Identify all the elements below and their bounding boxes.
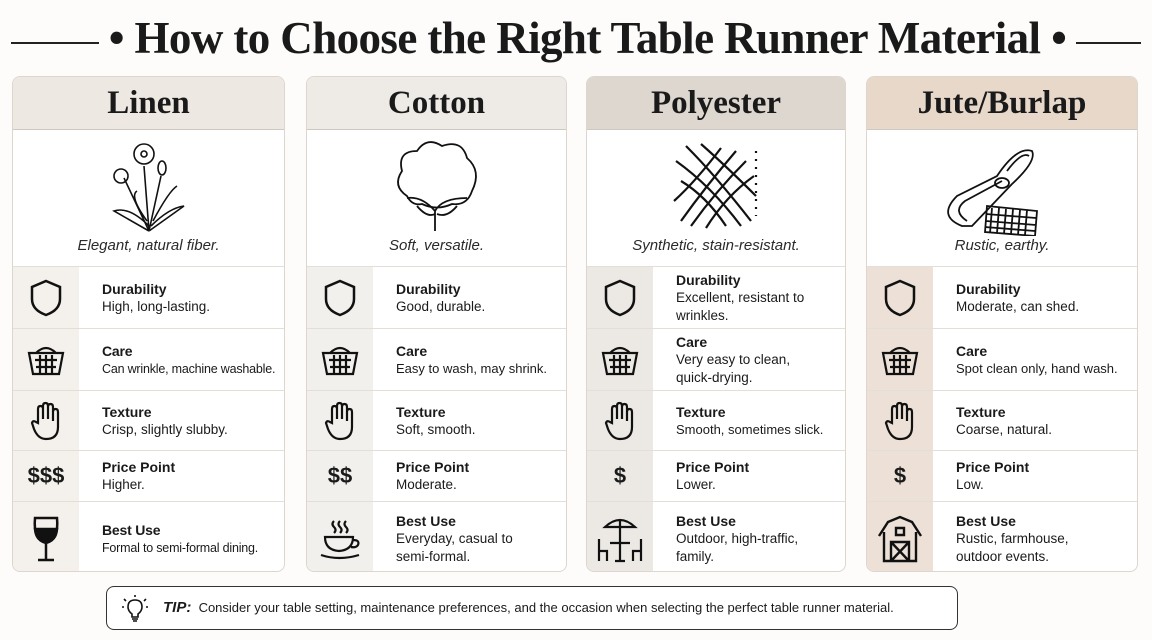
heading: linen (13, 77, 284, 130)
row: durability (867, 267, 1137, 329)
row: best use (13, 502, 258, 571)
heading: polyester: Polyester (651, 85, 781, 121)
row: durability (13, 267, 284, 329)
row: texture (307, 391, 566, 451)
row: price (587, 451, 845, 502)
row: price: Price Point (956, 459, 1029, 475)
row: price (307, 451, 566, 502)
heading: cotton (307, 77, 566, 130)
row: best use: Best Use (396, 512, 456, 528)
row: price: Higher. (102, 477, 145, 492)
row: care: Care (102, 342, 132, 358)
row: texture: Texture (102, 404, 152, 420)
panel: polyester (586, 76, 846, 572)
row: durability: Durability (396, 280, 461, 296)
illustration: twine and burlap (867, 130, 1137, 267)
row: care (13, 329, 284, 391)
row: price: Price Point (676, 459, 749, 475)
row: best use (867, 502, 1069, 571)
row: price: Price Point (396, 459, 469, 475)
row: best use: semi-formal. (396, 548, 470, 564)
row: care: Care (396, 342, 427, 358)
row: durability: wrinkles. (676, 308, 729, 322)
row: care: Easy to wash, may shrink. (396, 360, 547, 376)
row: care: Care (956, 342, 987, 358)
row: best use: family. (676, 548, 714, 564)
panel: linen (12, 76, 285, 572)
row: texture: Texture (956, 404, 1006, 420)
row: care (307, 329, 566, 391)
row: durability: Durability (102, 280, 167, 296)
row: texture: Smooth, sometimes slick. (676, 422, 823, 436)
row: best use (587, 502, 798, 571)
row: price: Lower. (676, 477, 716, 492)
row: texture: Texture (676, 404, 726, 420)
caption: Soft, versatile. (389, 237, 484, 254)
row: best use (307, 502, 513, 571)
caption: Elegant, natural fiber. (77, 237, 220, 254)
row: durability: Excellent, resistant to (676, 290, 804, 304)
row: price: Low. (956, 477, 984, 492)
row: durability: Durability (676, 272, 741, 288)
row: durability (587, 267, 845, 329)
row: best use: Best Use (676, 512, 736, 528)
row: texture (587, 391, 845, 451)
panel: jute/burlap (866, 76, 1138, 572)
row: care: quick-drying. (676, 370, 753, 384)
row: best use: Best Use (102, 522, 160, 538)
callout: tip (106, 586, 958, 630)
callout: tip: TIP: Consider your table setting, maintenance preferences, and the occasion when selecting the perfect table runner material. (163, 599, 894, 616)
row: texture: Soft, smooth. (396, 422, 476, 436)
row: price: $$$ (28, 463, 64, 488)
row: price: $$ (328, 463, 352, 488)
row: care: Care (676, 334, 707, 350)
heading: linen: Linen (107, 85, 190, 121)
row: price (13, 451, 284, 502)
row: price: $ (614, 463, 626, 488)
row: texture (13, 391, 284, 451)
heading: jute/burlap: Jute/Burlap (918, 85, 1086, 121)
heading: cotton: Cotton (388, 85, 485, 121)
icon: lightbulb (122, 595, 148, 622)
row: care (867, 329, 1137, 391)
row: price (867, 451, 1137, 502)
illustration: cotton boll (307, 130, 566, 267)
row: price: Moderate. (396, 477, 457, 492)
heading: jute/burlap (867, 77, 1137, 130)
row: price: $ (894, 463, 906, 488)
row: care: Can wrinkle, machine washable. (102, 362, 275, 376)
row: best use: Outdoor, high-traffic, (676, 530, 798, 546)
row: durability: Durability (956, 280, 1021, 296)
row: best use: outdoor events. (956, 548, 1049, 564)
row: care: Very easy to clean, (676, 352, 790, 366)
row: durability: Good, durable. (396, 298, 485, 314)
panel: cotton (306, 76, 567, 572)
row: durability (307, 267, 566, 329)
row: care (587, 329, 845, 391)
row: best use: Everyday, casual to (396, 530, 513, 546)
row: best use: Formal to semi-formal dining. (102, 540, 258, 554)
illustration: synthetic fibers (587, 130, 845, 267)
row: best use: Rustic, farmhouse, (956, 530, 1069, 546)
row: durability: Moderate, can shed. (956, 298, 1079, 314)
row: best use: Best Use (956, 512, 1016, 528)
row: texture: Crisp, slightly slubby. (102, 422, 228, 436)
heading: polyester (587, 77, 845, 130)
row: texture: Coarse, natural. (956, 422, 1052, 436)
row: texture (867, 391, 1137, 451)
row: price: Price Point (102, 459, 175, 475)
row: care: Spot clean only, hand wash. (956, 360, 1118, 376)
caption: Rustic, earthy. (955, 237, 1049, 254)
title: • How to Choose the Right Table Runner Material • (109, 13, 1066, 63)
row: durability: High, long-lasting. (102, 298, 210, 314)
caption: Synthetic, stain-resistant. (632, 237, 800, 254)
row: texture: Texture (396, 404, 446, 420)
illustration: linen flower (13, 130, 284, 267)
